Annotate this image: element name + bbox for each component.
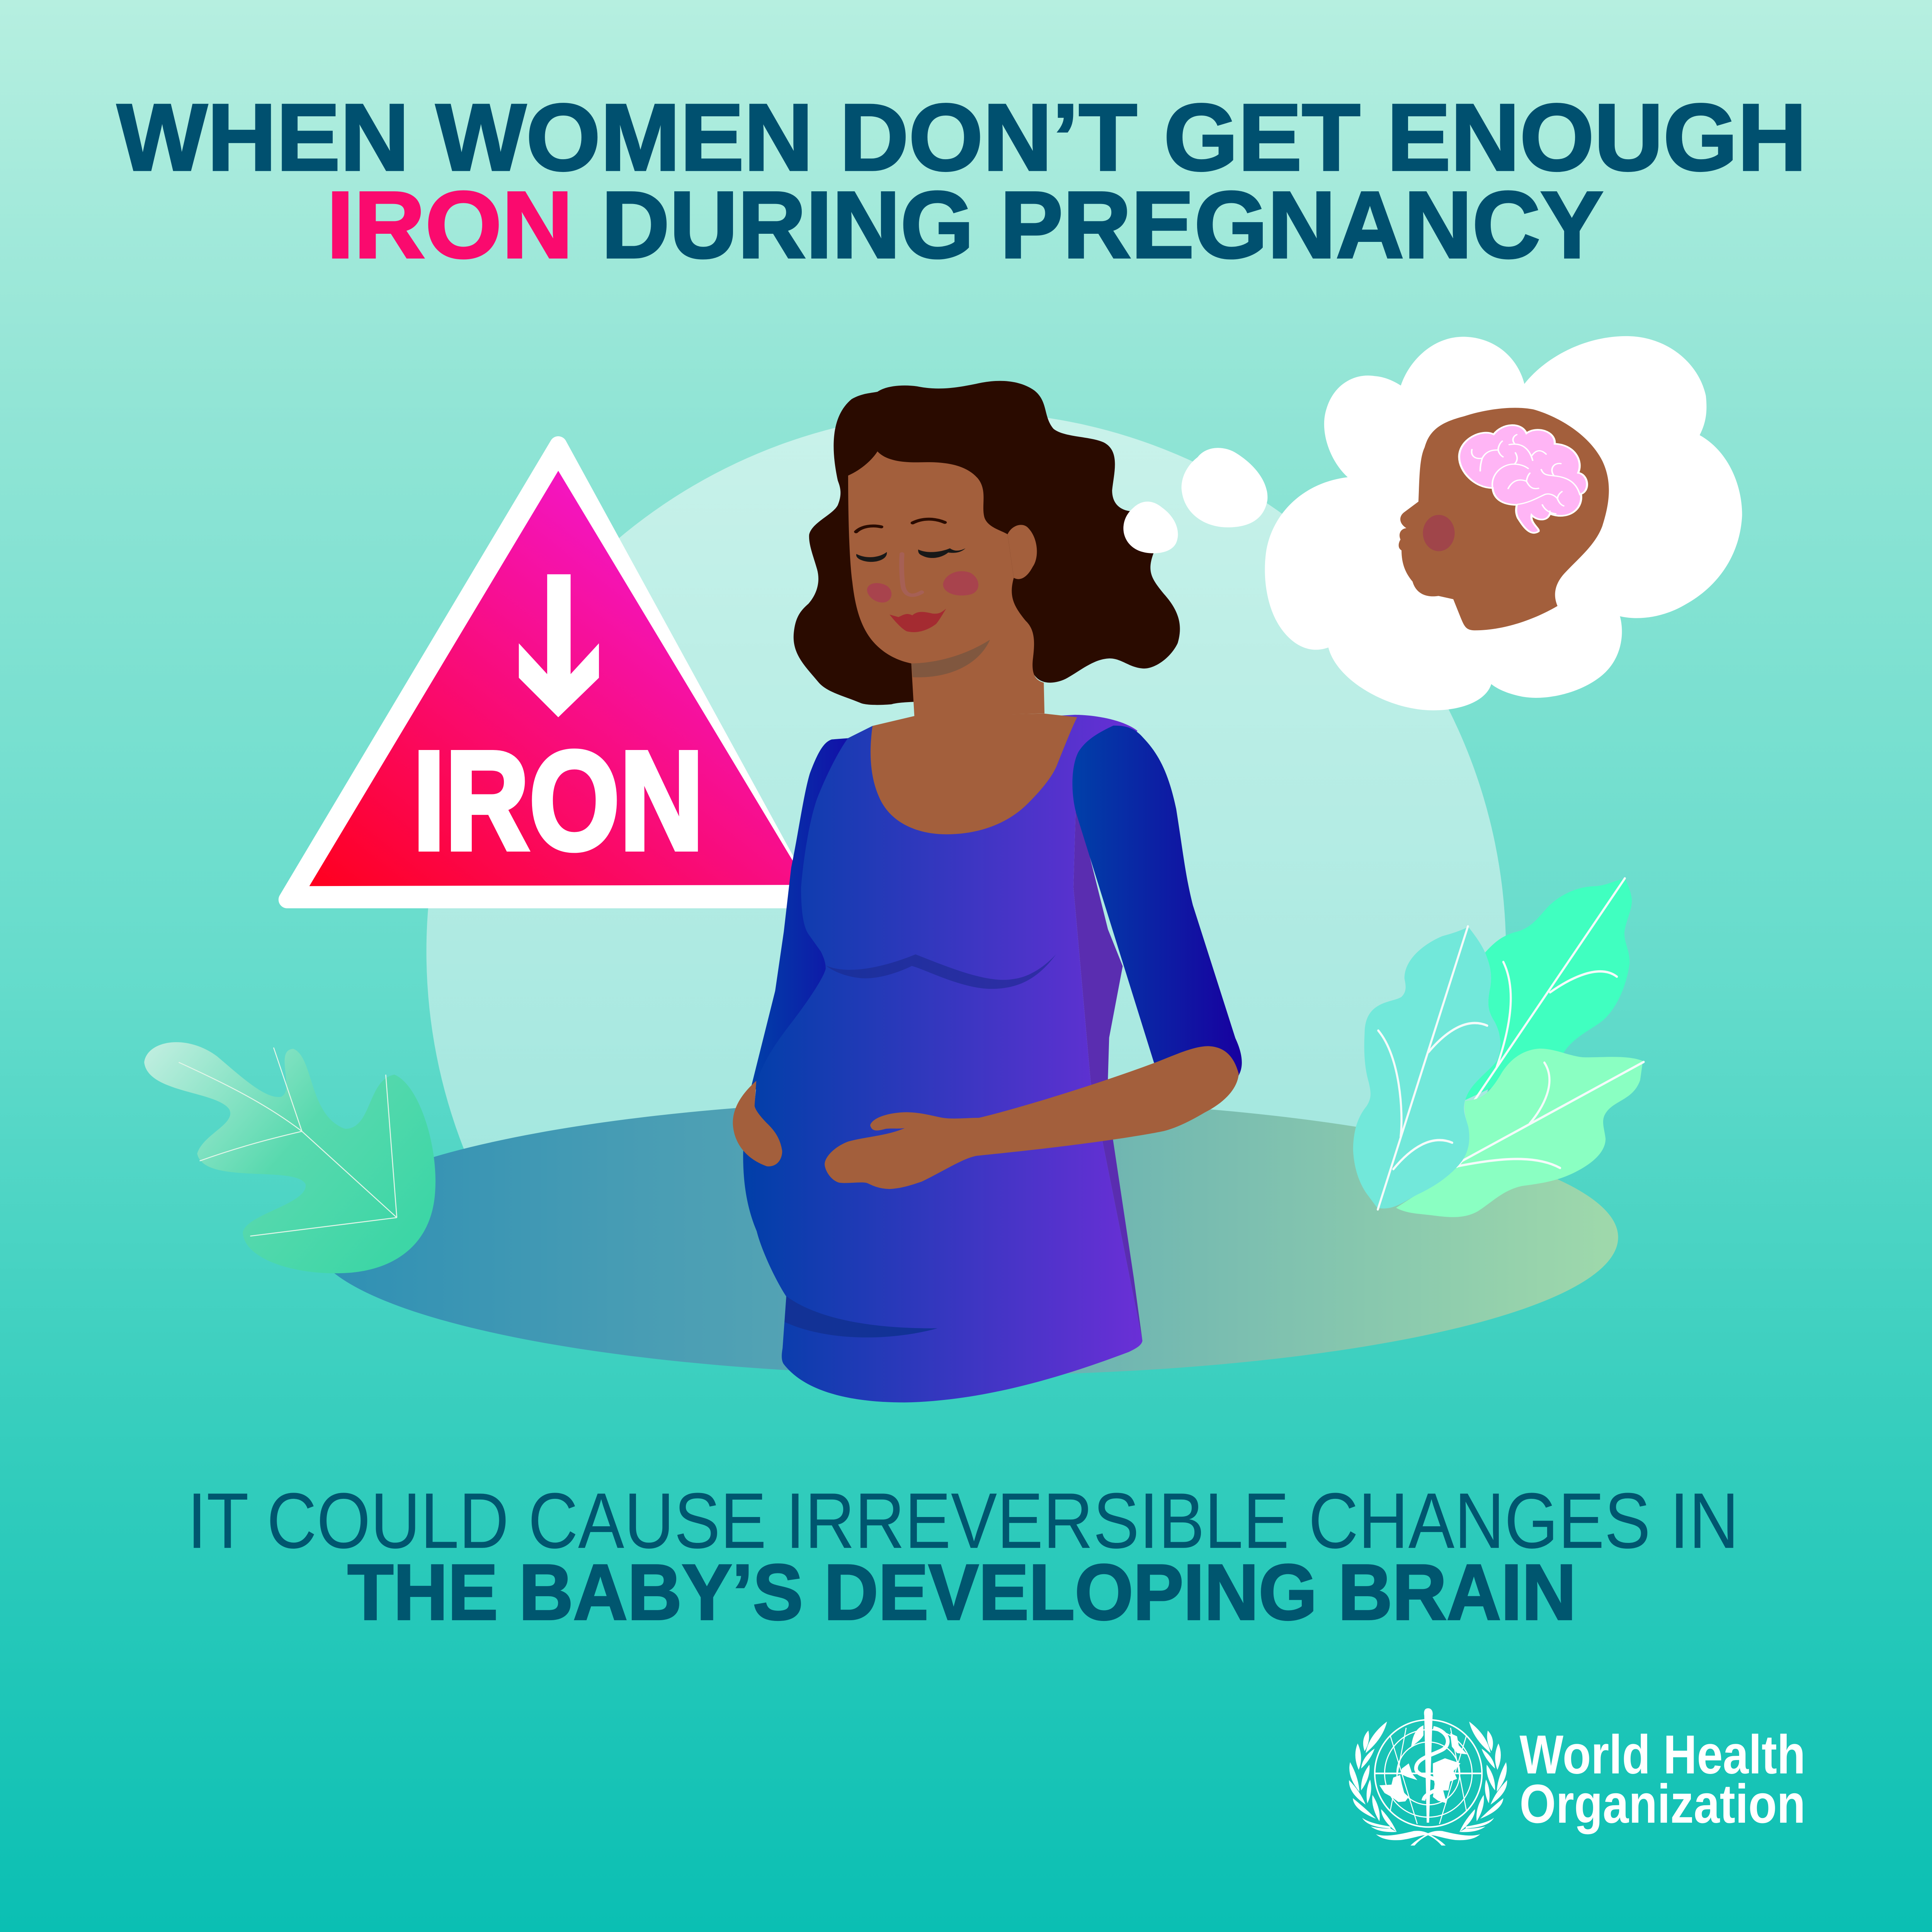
subheading bbox=[187, 1477, 1739, 1636]
globe rings bbox=[1374, 1720, 1483, 1827]
laurel right bbox=[1459, 1721, 1507, 1832]
ground shadow ellipse bbox=[312, 1099, 1618, 1375]
neck shadow bbox=[911, 640, 990, 677]
title: DURING PREGNANCY bbox=[601, 172, 1603, 278]
sign label: iron: IRON bbox=[413, 723, 704, 879]
left leaf bbox=[144, 1042, 435, 1273]
cloud bbox=[1265, 336, 1742, 710]
chest skin bbox=[871, 714, 1077, 834]
head and hair bbox=[794, 381, 1180, 717]
left sleeve bbox=[750, 738, 850, 1089]
ear bbox=[1008, 525, 1037, 579]
right leaves bbox=[1353, 878, 1644, 1217]
leaf: centre bbox=[1353, 926, 1500, 1209]
belly fold bbox=[785, 1296, 937, 1337]
left hand bbox=[733, 1081, 782, 1167]
WHO logo bbox=[1349, 1708, 1805, 1845]
hair bbox=[794, 381, 1180, 705]
dress side fold bbox=[1073, 801, 1143, 1341]
thought bubble: small dots bbox=[1123, 448, 1267, 553]
cheeks bbox=[867, 571, 978, 602]
leaf: top bbox=[1465, 878, 1632, 1100]
eyebrows bbox=[856, 519, 945, 532]
nose bbox=[901, 554, 922, 595]
warning triangle sign bbox=[287, 445, 807, 900]
title: WHEN WOMEN DON’T GET ENOUGH bbox=[117, 85, 1807, 190]
face and neck bbox=[848, 451, 1044, 717]
WHO wordmark bbox=[1520, 1725, 1805, 1835]
serpent bbox=[1416, 1728, 1448, 1801]
lips bbox=[889, 609, 946, 632]
brain bbox=[1459, 425, 1587, 533]
baby cheek bbox=[1423, 515, 1455, 551]
woman bbox=[733, 381, 1242, 1403]
title: IRON bbox=[327, 172, 573, 278]
right sleeve bbox=[1072, 726, 1242, 1078]
subheading: IT COULD CAUSE IRREVERSIBLE CHANGES IN bbox=[187, 1477, 1739, 1565]
staff and continents bbox=[1379, 1708, 1468, 1823]
ribbon bbox=[1376, 1831, 1480, 1845]
eyes bbox=[856, 548, 966, 562]
WHO wordmark: Organization bbox=[1520, 1774, 1805, 1835]
background circle bbox=[427, 412, 1506, 1232]
leaf: lower right bbox=[1396, 1049, 1644, 1217]
forearm and hand bbox=[825, 1046, 1239, 1189]
subheading: THE BABY’S DEVELOPING BRAIN bbox=[347, 1548, 1576, 1636]
WHO emblem bbox=[1349, 1708, 1507, 1845]
bust fold bbox=[826, 954, 1056, 989]
title bbox=[117, 85, 1807, 278]
thought cloud with baby head bbox=[1265, 336, 1742, 710]
WHO wordmark: World Health bbox=[1520, 1725, 1805, 1786]
icon: down arrow bbox=[519, 574, 599, 717]
laurel left bbox=[1349, 1721, 1397, 1832]
baby head bbox=[1399, 408, 1609, 630]
dress body bbox=[743, 715, 1143, 1403]
